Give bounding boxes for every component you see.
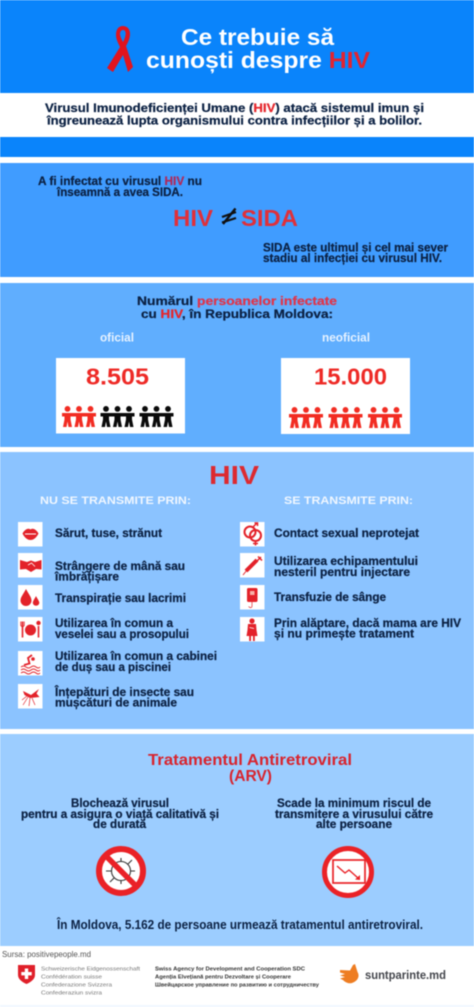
item: kiss [18,522,162,546]
item: sweat and tears: Transpirație sau lacrimi [55,591,186,605]
heading: HIV not equal SIDA [173,205,298,231]
text: Swiss Agency: Швейцарское управление по развитию и сотрудничеству [155,982,320,988]
card: unofficial count: 15.000 [314,364,387,390]
item: shared shower and pool [18,649,217,676]
icon: declining chart [324,848,372,896]
text: Swiss Agency: Swiss Agency for Development and Cooperation SDC [155,966,305,972]
item: insect bites [18,684,194,710]
item: shared dishes and towels [18,616,189,642]
heading: number of infected: cu HIV, în Republica Moldova: [141,307,333,321]
item: insect bites: Înțepături de insecte sau [54,684,194,699]
item: shared dishes and towels: Utilizarea în comun a [55,616,173,630]
card: unofficial count [281,358,410,434]
item: shared dishes and towels: veselei sau a prosopului [55,627,189,641]
panel: antiretroviral treatment [0,734,474,946]
blue band [0,137,474,157]
text: blocks the virus: pentru a asigura o viață calitativă și [21,807,219,821]
heading: number of infected: Numărul persoanelor infectate [137,294,337,308]
text: blocks the virus [21,796,219,831]
item: breastfeeding [240,616,462,642]
logo: Swiss Confederation [18,965,140,996]
item: sweat and tears [18,585,186,610]
text: SIDA definition: SIDA este ultimul și cel mai sever [263,240,448,254]
logo: suntparinte.md [340,964,446,983]
heading: HIV not equal SIDA: SIDA [241,205,298,231]
logo: Swiss Confederation: Schweizerische Eidgenossenschaft [41,966,140,972]
title: cunoști despre HIV [146,47,371,74]
heading: not transmitted through: NU SE TRANSMITE PRIN: [40,495,191,507]
panel: transmission [0,452,474,729]
heading: number of infected [137,294,337,321]
item: breastfeeding: și nu primește tratament [274,626,414,640]
heading: HIV not equal SIDA: HIV [173,205,214,231]
text: patients on treatment: În Moldova, 5.162 de persoane urmează tratamentul antiretroviral. [56,917,423,932]
item: unprotected sex: Contact sexual neprotejat [274,526,419,540]
text: reduces transmission [275,796,433,831]
text: SIDA definition [263,240,448,265]
heading: transmitted through: SE TRANSMITE PRIN: [284,495,413,507]
logo: Swiss Confederation: Confederaziun svizra [41,990,103,996]
text: source: Sursa: positivepeople.md [2,950,91,959]
icon: red ribbon [107,26,133,72]
panel: intro text: Virusul Imunodeficienței Umane ( HIV) atacă sistemul imun și [45,101,424,115]
text: SIDA definition: stadiu al infecției cu virusul HIV. [263,251,442,265]
icon: people, one red group and two black groups [62,406,174,427]
text: blocks the virus: de durată [93,817,146,831]
heading: treatment: Tratamentul Antiretroviral [148,752,352,769]
text: infected does not mean AIDS [38,174,202,199]
text: infected does not mean AIDS: înseamnă a avea SIDA. [56,185,183,199]
logo: Swiss Confederation: Confederazione Svizzera [41,982,113,988]
text: blocks the virus: Blochează virusul [71,796,169,810]
logo: suntparinte.md: suntparinte.md [365,970,446,982]
label: official: oficial [100,332,134,344]
text: reduces transmission: alte persoane [316,817,392,831]
item: shared shower and pool: Utilizarea în comun a cabinei [55,649,217,663]
text: Swiss Agency [155,966,320,988]
panel: HIV is not AIDS [0,163,474,277]
icon: people, three red groups [289,407,402,428]
icon: not equal sign [222,208,236,224]
heading: HIV: HIV [209,460,260,490]
item: insect bites: mușcături de animale [55,696,177,710]
panel: header [0,0,474,93]
heading: treatment: (ARV) [229,768,272,785]
icon: virus blocked [99,849,143,893]
item: unprotected sex [240,522,419,546]
item: kiss: Sărut, tuse, strănut [55,526,162,540]
label: unofficial: neoficial [322,332,370,344]
item: shared shower and pool: de duș sau a piscinei [55,660,171,674]
item: blood transfusion [240,585,386,610]
item: blood transfusion: Transfuzie de sânge [274,590,386,604]
panel: number of infected people [0,283,474,447]
logo: Swiss Confederation: Confédération suisse [41,974,102,980]
card: official count [56,358,185,434]
item: handshake [18,553,185,584]
item: handshake: Strângere de mână sau [55,559,185,573]
text: infected does not mean AIDS: A fi infectat cu virusul HIV nu [38,174,202,188]
card: official count: 8.505 [86,364,149,390]
item: non-sterile injection equipment: Utilizarea echipamentului [274,554,418,568]
panel: intro text [0,93,474,136]
title [146,24,371,74]
title: Ce trebuie să [181,24,334,50]
item: non-sterile injection equipment [240,553,418,579]
item: breastfeeding: Prin alăptare, dacă mama are HIV [274,616,462,630]
text: Swiss Agency: Agenția Elvețiană pentru Dezvoltare și Cooperare [155,974,291,980]
text: reduces transmission: Scade la minimum riscul de [277,796,431,810]
item: non-sterile injection equipment: nesteril pentru injectare [274,565,410,579]
text: reduces transmission: transmitere a virusului către [275,807,433,821]
heading: treatment [148,752,352,785]
item: handshake: îmbrățișare [54,570,119,584]
panel: footer [0,950,474,1007]
panel: intro text: îngreunează lupta organismului contra infecțiilor și a bolilor. [46,114,422,128]
